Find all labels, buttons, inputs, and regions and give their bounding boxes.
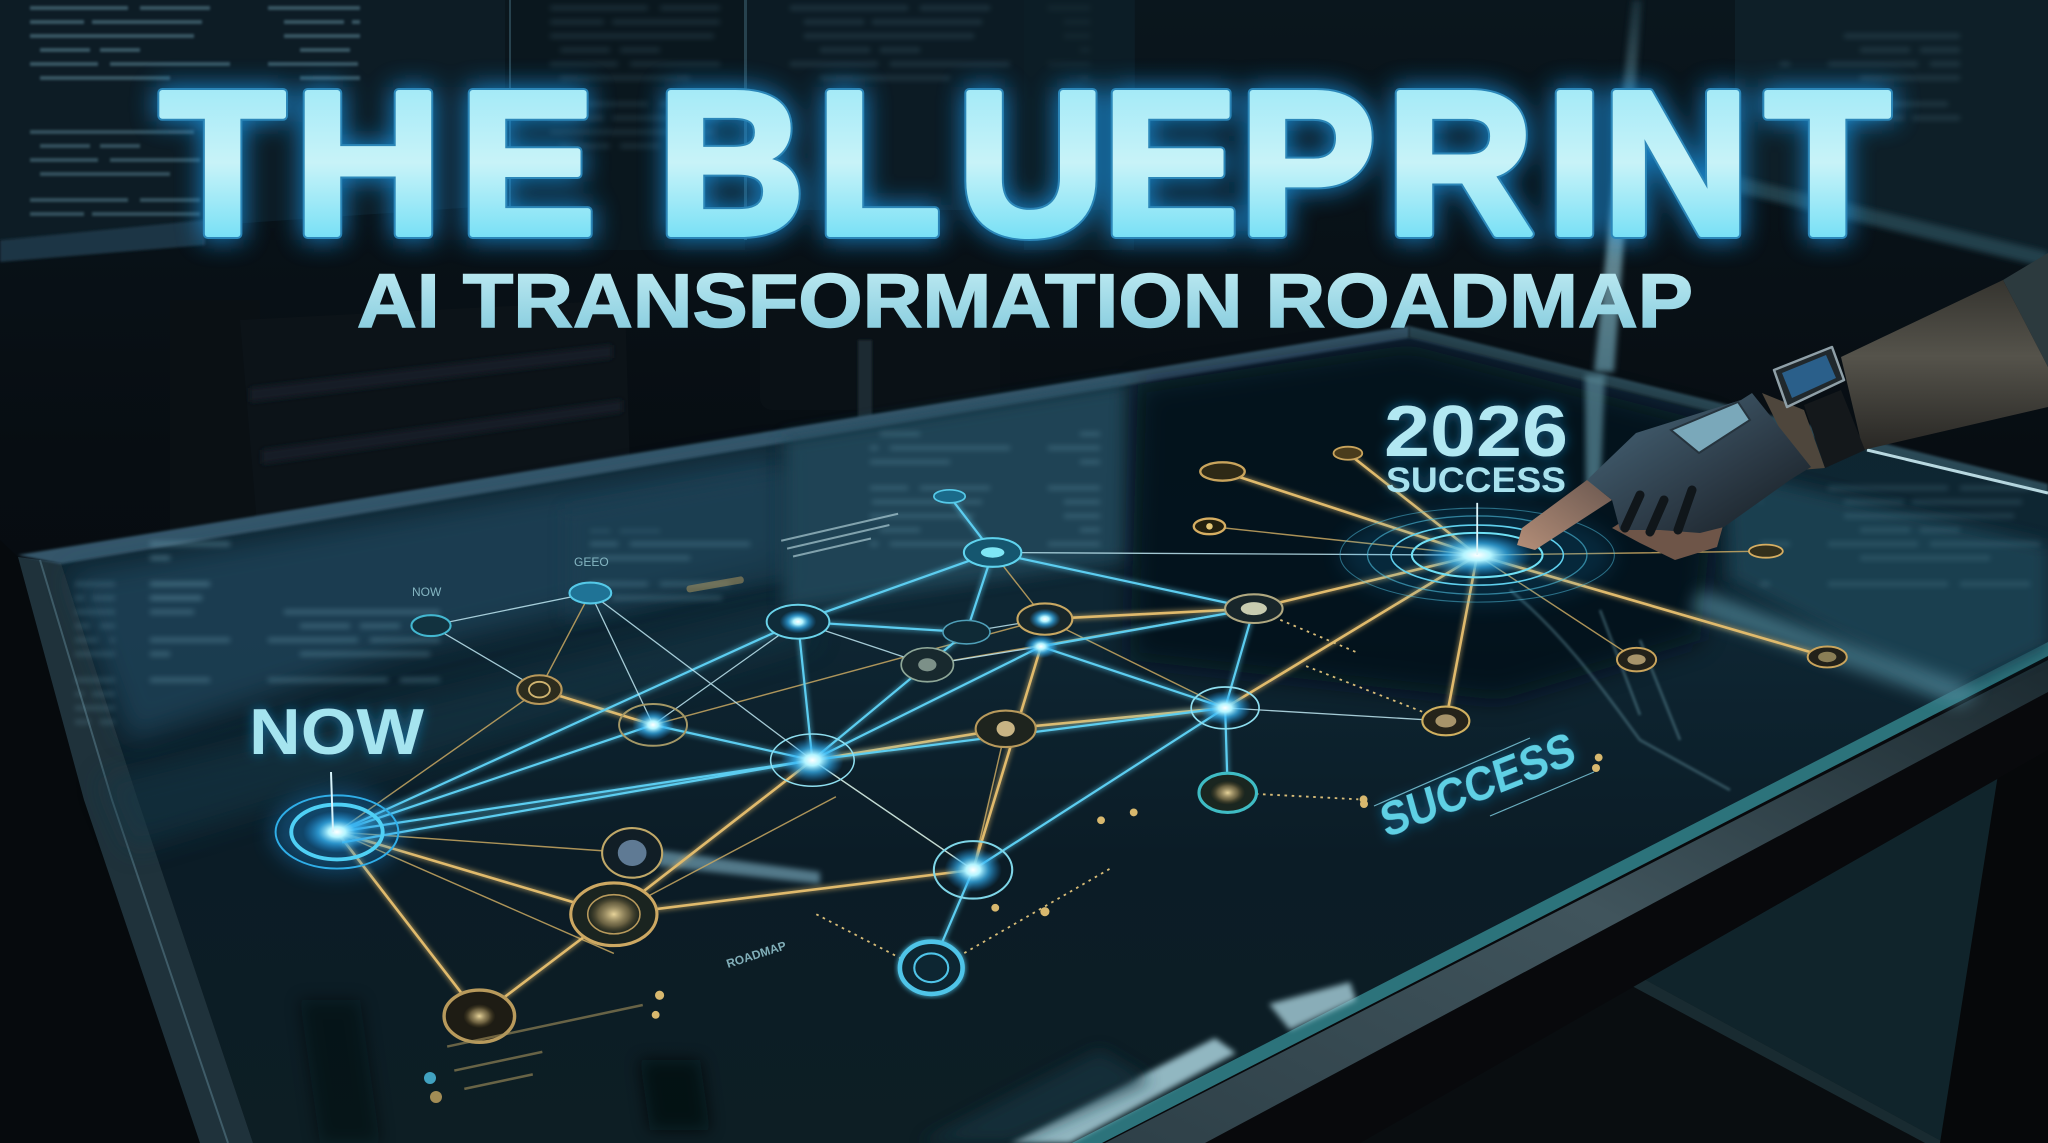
label: SUCCESS on the glass: SUCCESS bbox=[1374, 721, 1580, 848]
left frame bbox=[0, 540, 200, 1143]
knuckles bbox=[1612, 510, 1726, 560]
wrist bbox=[1762, 393, 1825, 470]
pointing finger bbox=[1517, 480, 1612, 550]
connections: thin white-blue bbox=[431, 552, 1477, 870]
background screen: left code monitor bbox=[0, 0, 505, 262]
subtitle: AI TRANSFORMATION ROADMAP bbox=[357, 259, 1693, 344]
title glow: THE BLUEPRINT bbox=[160, 49, 1890, 278]
node: bright S bbox=[1024, 635, 1058, 658]
label: 2026 SUCCESS: 2026 bbox=[1384, 392, 1568, 472]
node: 2026 success hub bbox=[1340, 503, 1614, 605]
node: NOW hub bbox=[272, 790, 402, 874]
label: 2026 SUCCESS: SUCCESS bbox=[1386, 461, 1566, 500]
lit vertical pole bbox=[1594, 0, 1642, 372]
hand reflection bbox=[1510, 590, 1730, 790]
network roadmap diagram bbox=[272, 447, 1847, 1042]
title text: THE BLUEPRINT bbox=[160, 49, 1890, 278]
front beam bbox=[1100, 650, 2048, 1143]
watch bbox=[1774, 347, 1844, 407]
forearm bbox=[1841, 280, 2048, 450]
node: bright E bbox=[771, 734, 854, 786]
faint floating labels on the glass: GEEO bbox=[574, 555, 609, 569]
node: G bbox=[602, 828, 662, 878]
small gold dots bbox=[652, 754, 1603, 1019]
node: gold-teal N bbox=[1199, 773, 1256, 812]
faint floating labels on the glass bbox=[412, 513, 902, 1103]
node: gold AB bbox=[1617, 648, 1656, 671]
faint floating labels on the glass: ROADMAP bbox=[725, 938, 788, 971]
connections: thin gold bbox=[337, 526, 1766, 953]
node: small blue W bbox=[934, 490, 965, 503]
hand pointing at the 2026 node bbox=[1517, 253, 2048, 560]
sleeve bbox=[2003, 253, 2048, 367]
connections: thick gold bbox=[337, 453, 1827, 1016]
floor seen through the frame bbox=[1644, 770, 2000, 1143]
glass surface bbox=[61, 337, 2048, 1143]
node: gold Y bbox=[1334, 447, 1362, 460]
background screen: right code monitor bbox=[1024, 0, 2048, 268]
node: gold Z bbox=[1194, 519, 1225, 534]
node: blue F bbox=[767, 605, 829, 639]
node: gold I bbox=[444, 990, 515, 1042]
node: large gold H bbox=[571, 883, 657, 946]
glove finger seams bbox=[1625, 490, 1692, 532]
glove bbox=[1587, 393, 1811, 533]
node: bright M bbox=[1191, 687, 1259, 729]
node: gold O bbox=[1422, 707, 1469, 735]
connections: dotted bbox=[816, 609, 1446, 964]
node: small cyan B bbox=[569, 583, 611, 603]
node: gold X bbox=[1200, 462, 1245, 481]
table: glass top and frame bbox=[0, 326, 2048, 1143]
table leg bbox=[1940, 700, 2048, 1143]
back frame edges bbox=[18, 326, 1409, 564]
node: bright J bbox=[934, 841, 1012, 899]
node: cyan ring K bbox=[900, 942, 963, 994]
node: U bbox=[901, 648, 953, 682]
node: gold L bbox=[976, 711, 1036, 747]
label: 2026 SUCCESS bbox=[1384, 392, 1568, 500]
faint floating labels on the glass: NOW bbox=[412, 585, 442, 599]
node: gold Q bbox=[1225, 594, 1283, 623]
node: blue-gold D bbox=[619, 704, 687, 746]
connections: cyan bbox=[337, 496, 1254, 968]
background screen: middle code monitors bbox=[509, 0, 1135, 250]
label: NOW: NOW bbox=[249, 695, 425, 768]
title bbox=[160, 49, 1890, 278]
node: blue V bbox=[964, 538, 1021, 567]
node: gold R bbox=[1017, 603, 1072, 635]
node: gold AC bbox=[1808, 647, 1847, 667]
node: small cyan A bbox=[411, 615, 451, 636]
glass reflections of code screens bbox=[70, 345, 2048, 1143]
node: gold AA bbox=[1749, 545, 1783, 558]
watch band bbox=[1804, 390, 1865, 468]
glove knuckle pad bbox=[1671, 402, 1750, 453]
node: gold C bbox=[517, 675, 562, 704]
area below the table bbox=[1300, 700, 2048, 1143]
node: teal T bbox=[943, 620, 990, 644]
title outline: THE BLUEPRINT bbox=[160, 49, 1890, 278]
office chair bbox=[170, 300, 1000, 560]
